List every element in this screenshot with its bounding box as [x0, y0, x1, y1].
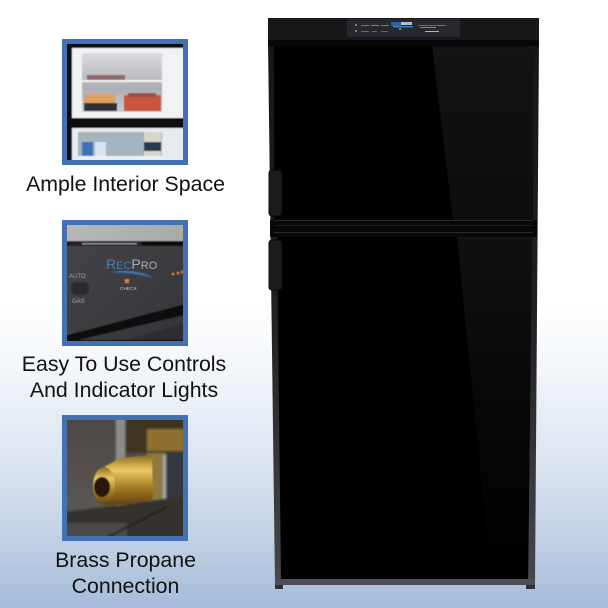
hinge bar [270, 220, 537, 237]
freezer door [274, 46, 533, 220]
fridge door [277, 237, 532, 579]
control panel [347, 19, 460, 37]
label: easy to use controls [22, 352, 226, 402]
lower door handle [269, 240, 282, 290]
photo: interior space [62, 39, 188, 165]
photo: controls: GAS [72, 299, 85, 305]
label: ample interior space: Ample Interior Space [26, 172, 225, 196]
photo: controls: CHECK [120, 286, 138, 292]
photo: controls: RECPRO [106, 256, 158, 272]
photo: controls [62, 220, 188, 346]
label: brass propane connection: Brass Propane [55, 548, 196, 572]
fridge body frame [268, 40, 539, 589]
label: brass propane connection: Connection [72, 574, 179, 598]
photo: brass connection [62, 415, 188, 541]
photo: controls: AUTO [69, 274, 86, 280]
upper door handle [269, 170, 282, 216]
label: easy to use controls: Easy To Use Controls [22, 352, 226, 376]
label: easy to use controls: And Indicator Lights [30, 378, 218, 402]
top control strip [268, 18, 539, 46]
label: brass propane connection [55, 548, 196, 598]
